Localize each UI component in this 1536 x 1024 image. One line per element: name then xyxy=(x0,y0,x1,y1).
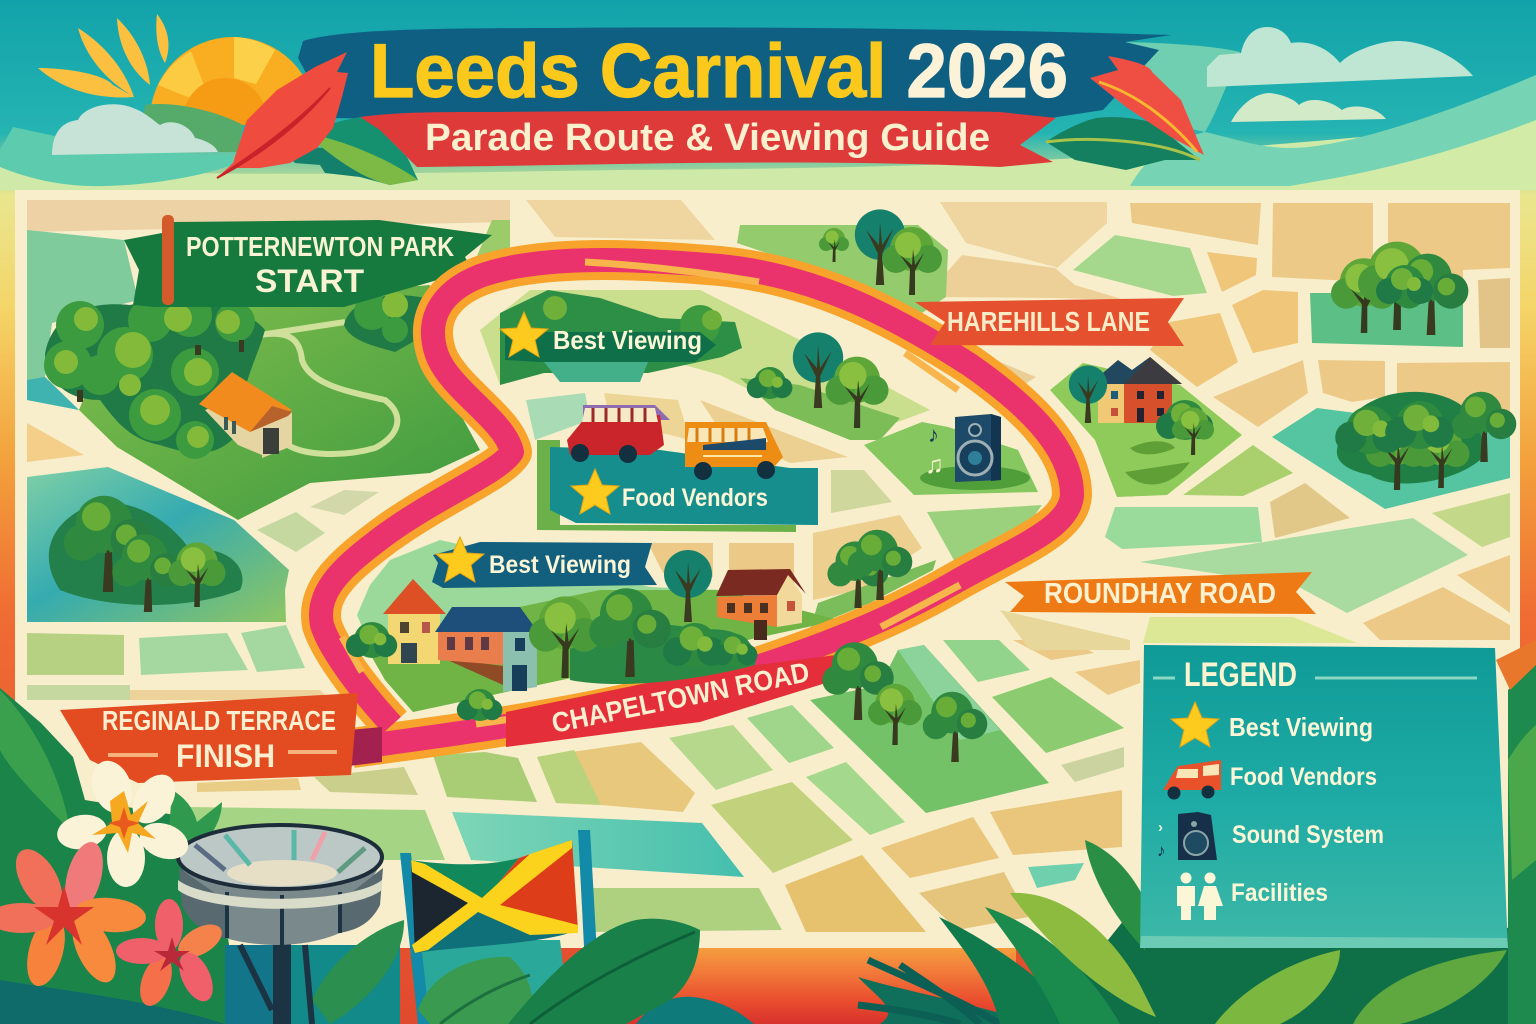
bottom centre foliage xyxy=(418,919,754,1024)
under flag teal xyxy=(411,940,570,1024)
legend panel xyxy=(1140,645,1508,948)
map blocks teal xyxy=(452,812,744,877)
sky and hills xyxy=(0,42,1536,190)
legend: best viewing: Best Viewing xyxy=(1229,712,1373,742)
chapeltown road label: CHAPELTOWN ROAD xyxy=(549,656,812,739)
legend: food vendors: Food Vendors xyxy=(1230,763,1377,791)
legend: sound system: › xyxy=(1158,819,1163,836)
best viewing callout south: Best Viewing xyxy=(489,551,631,579)
icon: sound system xyxy=(920,414,1030,490)
village green xyxy=(357,540,840,712)
subtitle text: Parade Route & Viewing Guide xyxy=(425,117,990,159)
legend: facilities xyxy=(1177,872,1328,920)
start label: POTTERNEWTON PARK xyxy=(186,231,454,262)
icon: orange food van xyxy=(685,422,783,480)
icon: clouds right xyxy=(1207,27,1473,122)
legend: sound system: ♪ xyxy=(1157,841,1166,860)
park north bushes xyxy=(344,292,425,352)
trees: top park xyxy=(819,209,942,295)
icon: sun xyxy=(38,14,316,125)
top strip left xyxy=(27,200,510,232)
legend: facilities: Facilities xyxy=(1231,879,1328,907)
village houses xyxy=(383,357,1182,692)
food vendors label xyxy=(571,469,768,514)
icon: right leaf and feather xyxy=(1046,56,1204,170)
house blue xyxy=(435,607,538,692)
trees: east cluster north xyxy=(1331,242,1468,335)
start sign xyxy=(124,215,492,307)
best viewing callout south xyxy=(432,537,657,588)
icon: steel drum xyxy=(177,825,383,1024)
house red xyxy=(716,569,806,640)
tree bottom park xyxy=(810,645,1049,813)
green hill by sun xyxy=(140,104,243,152)
route end marker xyxy=(349,727,382,766)
best viewing callout north: Best Viewing xyxy=(553,325,702,355)
trees: east cluster south xyxy=(1335,392,1516,490)
icon: cloud left xyxy=(52,104,218,155)
park: Potternewton Park xyxy=(44,220,510,520)
title text: Leeds Carnival 2026 xyxy=(370,29,1068,114)
flower cream xyxy=(54,755,193,887)
sun rays xyxy=(38,14,168,97)
food court block xyxy=(526,393,818,532)
map blocks green xyxy=(27,235,1510,932)
east village green xyxy=(1050,363,1242,497)
icon: star xyxy=(500,312,548,357)
finish banner: FINISH xyxy=(176,738,275,774)
parade route xyxy=(321,260,1072,748)
park tree cluster xyxy=(44,293,265,459)
trees: east village xyxy=(1069,365,1214,455)
icon: red food van xyxy=(567,405,670,463)
trees xyxy=(49,209,1516,762)
harehills lane label: HAREHILLS LANE xyxy=(947,306,1150,337)
trees: south west xyxy=(49,496,243,612)
legend heading: LEGEND xyxy=(1184,656,1297,694)
east parks xyxy=(1272,293,1510,509)
bottom centre fern xyxy=(858,960,1037,1024)
food vendors label: Food Vendors xyxy=(622,484,768,512)
roundhay road label: ROUNDHAY ROAD xyxy=(1044,578,1276,610)
north area inside route xyxy=(480,290,930,440)
finish banner: REGINALD TERRACE xyxy=(102,705,336,736)
harehills lane label xyxy=(915,298,1184,346)
trees: south xyxy=(822,642,987,762)
icon: Jamaican flag xyxy=(400,830,601,1024)
bottom right foliage xyxy=(939,640,1536,1024)
map base xyxy=(15,190,1520,948)
icon: sound system: ♪ xyxy=(928,422,939,447)
subtitle ribbon xyxy=(360,110,1056,167)
legend: sound system xyxy=(1157,812,1384,860)
flower red large xyxy=(0,838,147,990)
bottom left foliage xyxy=(0,688,404,1024)
park path xyxy=(245,322,397,454)
trees: village xyxy=(346,550,757,721)
title banner xyxy=(298,27,1171,120)
icon: park house xyxy=(199,372,292,458)
best viewing callout north xyxy=(500,290,742,385)
trees: mid north xyxy=(747,332,888,428)
trees: mid east xyxy=(827,530,912,608)
legend: sound system: Sound System xyxy=(1232,821,1384,849)
speaker green and lower blocks xyxy=(737,225,1042,627)
house yellow xyxy=(383,579,446,664)
icon: sound system: ♫ xyxy=(925,451,944,479)
legend: food vendors xyxy=(1163,760,1377,800)
flower red small xyxy=(116,899,227,1010)
map blocks tan xyxy=(27,200,1510,932)
roundhay road label xyxy=(1005,572,1316,614)
icon: left leaf and feather xyxy=(217,52,418,185)
start sign: START xyxy=(255,263,364,299)
finish banner xyxy=(60,693,358,783)
legend: best viewing xyxy=(1171,702,1373,747)
house east xyxy=(1090,357,1182,423)
